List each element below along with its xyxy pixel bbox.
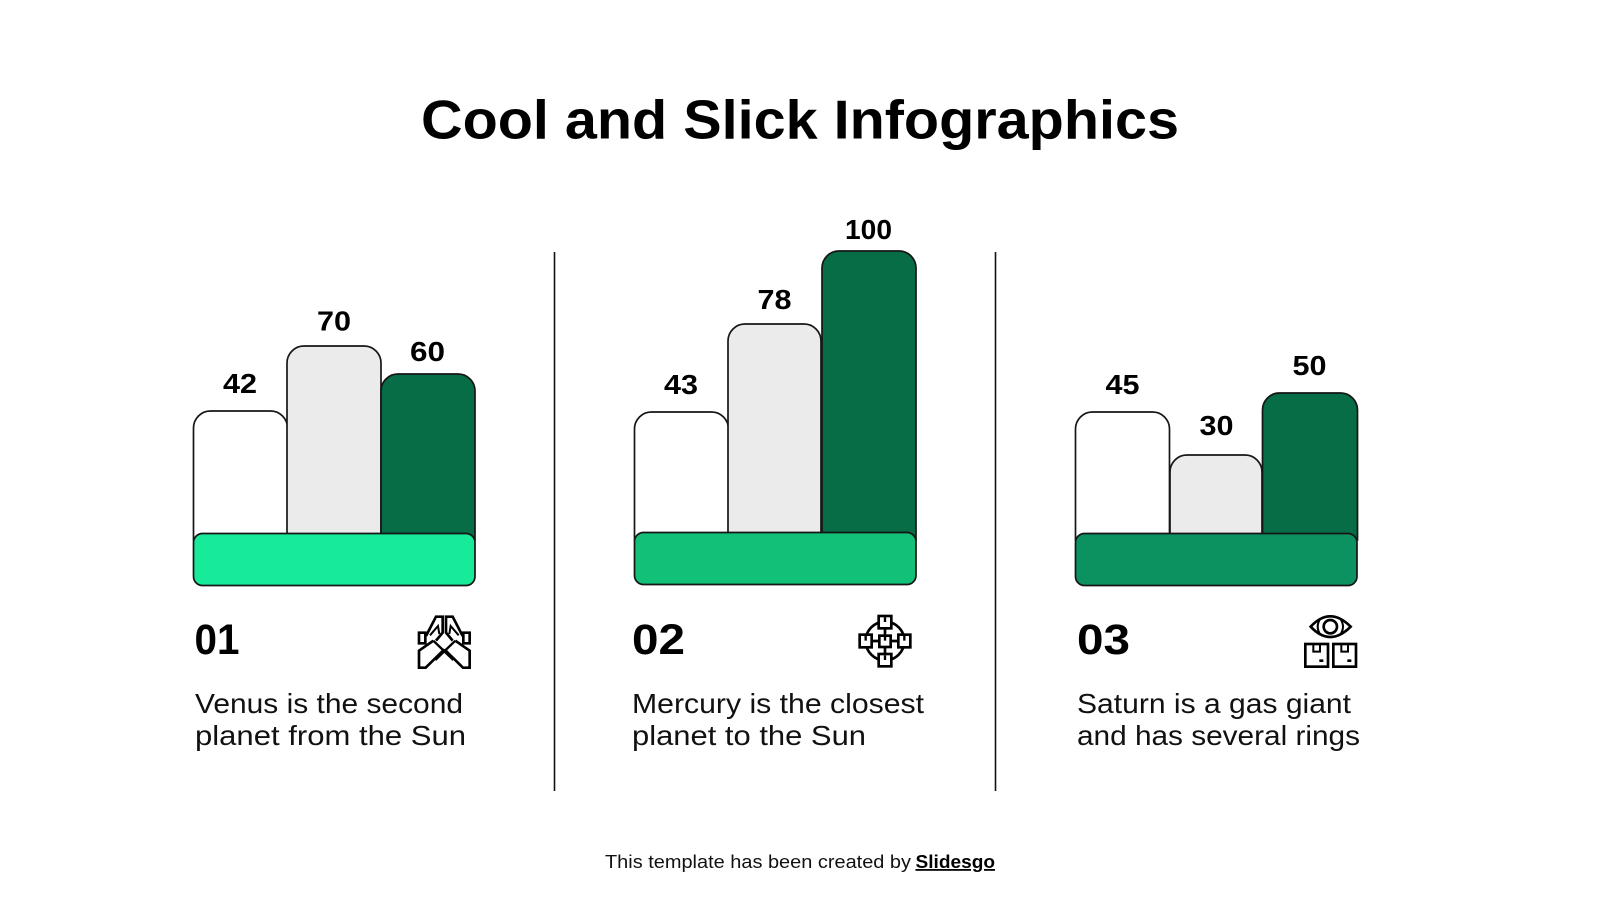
description 03: and has several rings <box>1077 720 1360 751</box>
title: Cool and Slick Infographics <box>421 88 1179 150</box>
bar 78 <box>728 324 821 540</box>
description 03: Saturn is a gas giant <box>1077 688 1351 719</box>
value 100: 100 <box>845 214 892 245</box>
value 42: 42 <box>223 368 257 399</box>
icon: praying hands <box>419 617 470 668</box>
bar 70 <box>287 346 381 540</box>
base bar <box>634 532 916 584</box>
value 45: 45 <box>1106 369 1140 400</box>
number 01: 01 <box>194 616 240 664</box>
value 43: 43 <box>664 369 698 400</box>
bar 100 <box>822 251 916 540</box>
bar 30 <box>1170 455 1262 540</box>
bar 45 <box>1076 412 1170 540</box>
value 50: 50 <box>1292 350 1326 381</box>
base bar <box>194 534 475 586</box>
description 01: Venus is the second <box>195 688 463 719</box>
footer credit: This template has been created by <box>605 852 911 872</box>
base bar <box>1076 534 1357 586</box>
footer credit: Slidesgo <box>916 852 995 872</box>
bar 42 <box>194 411 288 540</box>
description 02: planet to the Sun <box>632 720 866 751</box>
bar 43 <box>634 412 728 540</box>
bar 60 <box>381 374 475 540</box>
panel: 01 Venus <box>194 306 475 751</box>
description 02: Mercury is the closest <box>632 688 924 719</box>
value 70: 70 <box>317 306 351 336</box>
panel: 02 Mercury <box>632 214 932 751</box>
value 30: 30 <box>1200 410 1234 441</box>
number 03: 03 <box>1077 616 1130 664</box>
description 01: planet from the Sun <box>195 720 466 751</box>
bar chart 02 <box>634 214 916 584</box>
number 02: 02 <box>632 616 685 664</box>
bar chart 03 <box>1076 350 1358 586</box>
value 78: 78 <box>758 284 792 315</box>
icon: eye and boxes <box>1305 616 1356 667</box>
icon: network of boxes <box>860 616 910 666</box>
value 60: 60 <box>410 336 445 367</box>
bar chart 01 <box>194 306 475 586</box>
bar 50 <box>1262 393 1358 540</box>
panel: 03 Saturn <box>1076 350 1360 751</box>
